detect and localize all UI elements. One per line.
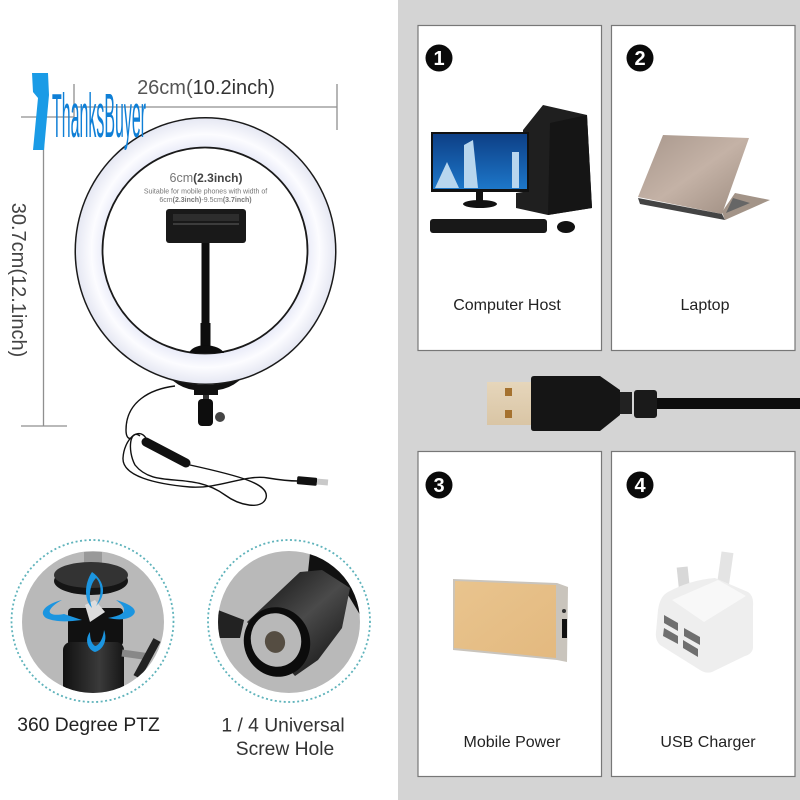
badge 4 [626, 472, 654, 498]
panel 2: laptop [612, 26, 795, 350]
phone size caption: Suitable for mobile phones with width of [144, 188, 267, 196]
text: ThanksBuyer [52, 82, 146, 151]
ball head illustration [54, 552, 157, 694]
grey disc [22, 551, 164, 693]
phone size caption: 6cm(2.3inch)-9.5cm(3.7inch) [159, 197, 252, 204]
badge 3: 3 [433, 475, 445, 497]
label: 1/4 universal screw hole [221, 716, 345, 760]
detail: screw hole [208, 540, 370, 702]
label: Mobile Power [464, 734, 561, 751]
phone size caption [144, 171, 267, 204]
ring lamp [74, 117, 336, 385]
monitor [431, 132, 529, 208]
height label: 30.7cm(12.1inch) [7, 203, 29, 357]
label: Computer Host [453, 297, 561, 314]
panel 3: mobile power [418, 452, 602, 776]
dotted circle [12, 540, 174, 702]
screw hole illustration [218, 554, 360, 677]
ring light product with dimensions [7, 77, 337, 505]
badge 2 [626, 44, 654, 72]
grey disc [218, 551, 360, 693]
width label: 26cm(10.2inch) [137, 77, 275, 99]
right grey background panel [398, 0, 800, 800]
label: USB Charger [660, 734, 756, 751]
base behind ring [170, 378, 242, 395]
ball head [198, 395, 225, 426]
badge 4: 4 [634, 475, 646, 497]
panel 4: USB charger [612, 452, 795, 776]
panel 1: computer host [418, 26, 602, 350]
power bank [453, 579, 568, 662]
watermark logo: ThanksBuyer [32, 73, 146, 151]
label: 1/4 universal screw hole: 1 / 4 Universal [221, 716, 345, 736]
badge 2: 2 [634, 48, 646, 70]
label: 1/4 universal screw hole: Screw Hole [236, 739, 334, 760]
detail: 360 degree PTZ [12, 540, 174, 702]
badge 3 [426, 472, 452, 498]
label: 360 Degree PTZ: 360 Degree PTZ [17, 715, 160, 736]
USB plug and cable [487, 376, 800, 431]
width dimension lines [74, 84, 337, 130]
laptop illustration [638, 135, 770, 220]
phone size caption: 6cm(2.3inch) [170, 171, 242, 185]
cable with controller and USB plug [123, 386, 328, 505]
blue rotation arrows [43, 572, 135, 652]
phone holder and gooseneck [166, 209, 246, 353]
badge 1: 1 [433, 48, 445, 70]
logo mark [32, 73, 49, 150]
keyboard and mouse [430, 219, 575, 233]
UK plug charger [656, 551, 753, 673]
badge 1 [426, 44, 452, 72]
height dimension lines [21, 117, 74, 426]
dotted circle [208, 540, 370, 702]
tower [516, 105, 592, 215]
label: Laptop [681, 297, 730, 314]
